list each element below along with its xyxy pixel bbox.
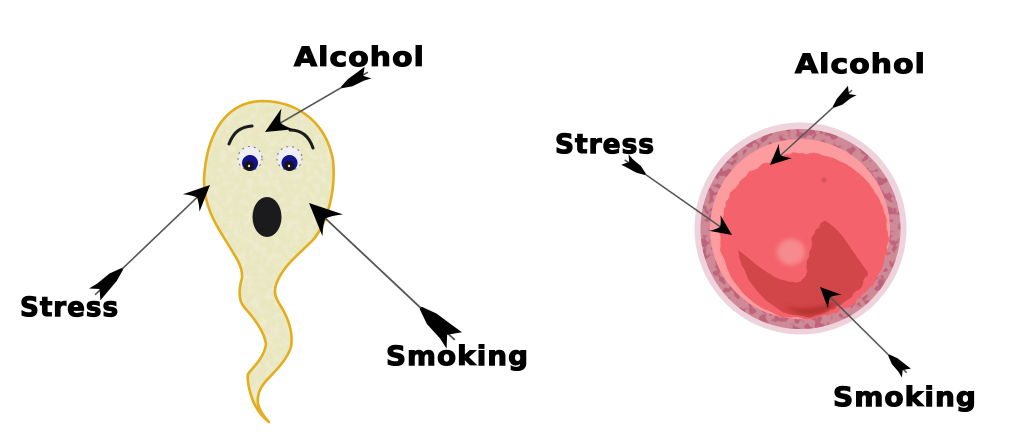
label: stress (sperm): Stress bbox=[20, 292, 119, 323]
left eyebrow bbox=[229, 126, 252, 144]
egg dark textured ring bbox=[700, 129, 900, 329]
left eye bbox=[238, 146, 262, 171]
label: smoking (egg): Smoking bbox=[833, 382, 977, 413]
label: smoking (sperm): Smoking bbox=[386, 341, 529, 372]
arrow: alcohol to egg bbox=[764, 83, 858, 172]
egg highlight bbox=[777, 239, 805, 265]
egg outer membrane bbox=[694, 122, 906, 334]
egg small spot bbox=[822, 178, 826, 182]
arrow: smoking to sperm bbox=[299, 192, 465, 351]
sperm body bbox=[204, 101, 334, 422]
arrow: stress to sperm bbox=[87, 176, 218, 304]
label: stress (egg): Stress bbox=[555, 129, 655, 160]
panel: egg cell bbox=[694, 122, 906, 334]
mouth bbox=[252, 197, 282, 237]
arrow: stress to egg bbox=[619, 152, 738, 243]
arrow: smoking to egg bbox=[813, 280, 913, 380]
panel: sperm cell bbox=[204, 101, 334, 422]
right eyebrow bbox=[290, 130, 313, 148]
arrow: alcohol to sperm bbox=[259, 62, 374, 142]
egg light inner ring bbox=[710, 139, 890, 319]
egg dark shading bbox=[738, 221, 868, 317]
label: alcohol (sperm): Alcohol bbox=[294, 42, 425, 73]
egg main body bbox=[720, 153, 888, 319]
egg deep shading bbox=[785, 300, 838, 315]
right eye bbox=[277, 146, 302, 171]
label: alcohol (egg): Alcohol bbox=[795, 49, 926, 80]
